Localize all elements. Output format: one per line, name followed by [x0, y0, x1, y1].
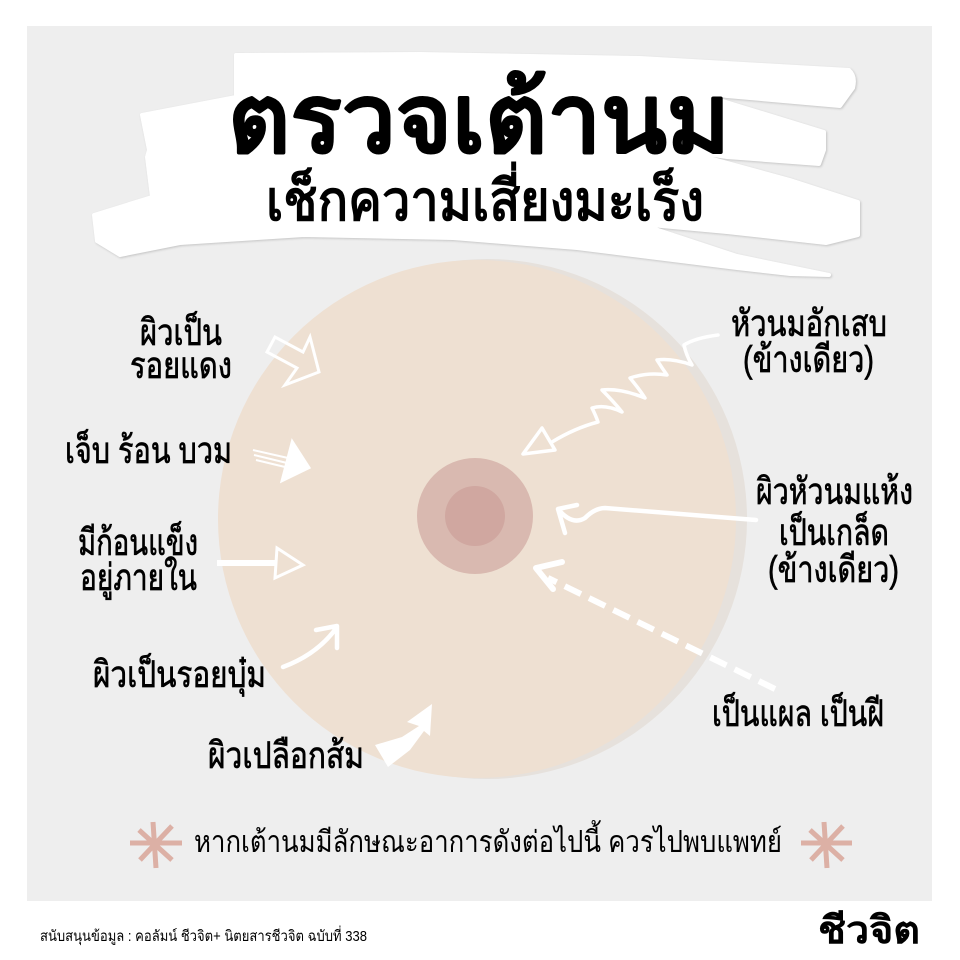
arrow: hooked: [558, 505, 756, 533]
icon: right asterisk: [801, 822, 852, 868]
breast shadow: [227, 259, 747, 779]
label: hard lump: [78, 519, 198, 600]
nipple: [445, 486, 505, 546]
label: inflamed nipple: [731, 303, 887, 380]
label: dry scaly nipple: (ข้างเดียว): [768, 549, 899, 590]
arrow: outlined head: [217, 548, 303, 578]
label: inflamed nipple: (ข้างเดียว): [743, 339, 874, 380]
label: dry scaly nipple: ผิวหัวนมแห้ง: [756, 471, 913, 512]
arrow: squiggle: [523, 335, 718, 454]
label: pain heat swelling: เจ็บ ร้อน บวม: [65, 427, 232, 471]
warning note: หากเต้านมมีลักษณะอาการดังต่อไปนี้ ควรไปพบแพทย์: [194, 820, 782, 859]
label: red skin: รอยแดง: [130, 345, 232, 386]
arrow: curved: [283, 626, 337, 667]
label: inflamed nipple: หัวนมอักเสบ: [731, 303, 887, 344]
label: orange peel skin: ผิวเปลือกส้ม: [208, 735, 364, 776]
title: ตรวจเต้านม: [228, 66, 730, 173]
arrow: wedge: [375, 704, 432, 767]
areola: [417, 458, 533, 574]
arrow: dashed: [536, 562, 775, 689]
label: red skin: [130, 309, 232, 386]
label: sores and blisters: เป็นแผล เป็นฝี: [712, 690, 884, 734]
label: dry scaly nipple: [756, 471, 913, 590]
label: hard lump: มีก้อนแข็ง: [78, 519, 198, 563]
icon: left asterisk: [130, 822, 182, 868]
label: dimpled skin: ผิวเป็นรอยบุ๋ม: [93, 651, 266, 697]
arrow: hatched: [253, 440, 310, 482]
label: dry scaly nipple: เป็นเกล็ด: [779, 509, 889, 553]
label: red skin: ผิวเป็น: [140, 309, 222, 353]
white brush strokes: [94, 54, 858, 275]
arrow: outlined block: [267, 337, 319, 385]
breast circle: [218, 260, 736, 778]
source credit: สนับสนุนข้อมูล : คอลัมน์ ชีวจิต+ นิตยสารชีวจิต ฉบับที่ 338: [40, 925, 367, 946]
breast diagram: [218, 259, 747, 779]
logo wordmark: ชีวจิต: [818, 910, 920, 952]
label: hard lump: อยู่ภายใน: [80, 556, 197, 600]
subtitle: เช็กความเสี่ยงมะเร็ง: [266, 162, 704, 232]
